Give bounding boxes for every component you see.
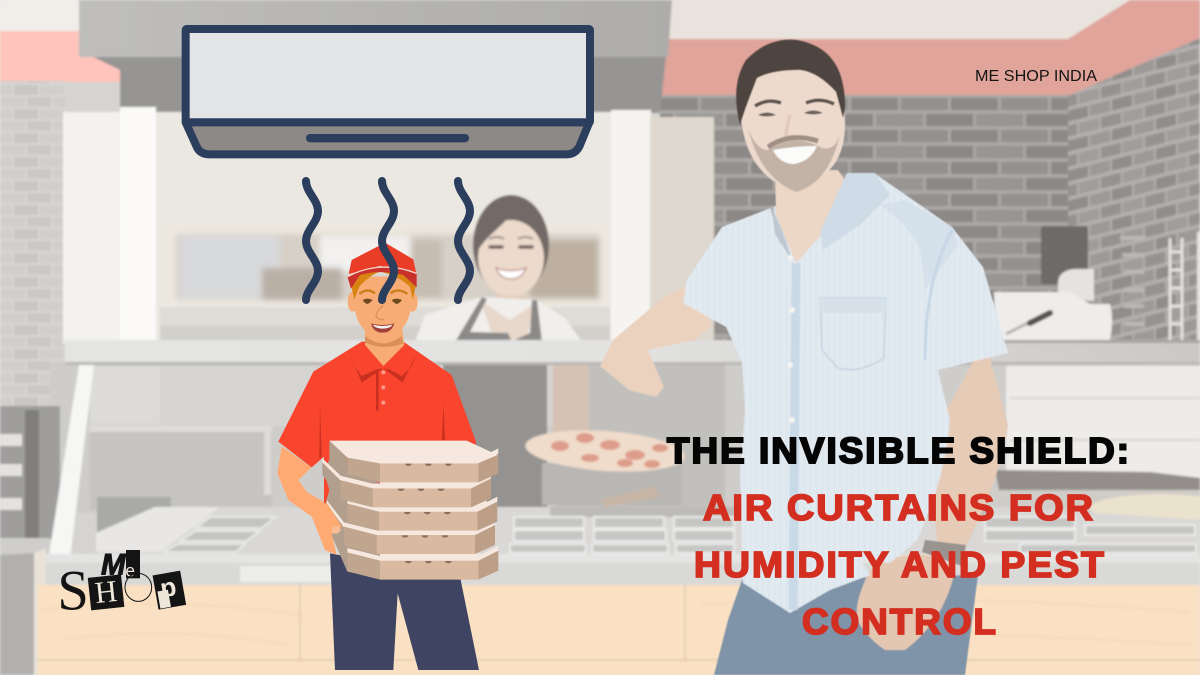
back band right xyxy=(995,470,1200,495)
thumb xyxy=(330,525,342,535)
teeth xyxy=(373,325,393,329)
lower panel left xyxy=(90,428,272,510)
lower panel post xyxy=(264,425,271,495)
stack filler xyxy=(323,460,380,578)
beard xyxy=(748,125,842,192)
box 1 flap xyxy=(329,441,347,474)
window dark right xyxy=(530,240,598,298)
box 3 xyxy=(346,497,497,531)
steam trays centre and right xyxy=(510,517,1196,553)
wood grain xyxy=(40,599,1190,645)
woman neck xyxy=(496,275,526,315)
AC vent slot xyxy=(306,134,469,142)
title line 2: AIR CURTAINS FOR xyxy=(703,487,1095,528)
placket xyxy=(793,263,796,610)
lower right of woman xyxy=(555,365,725,515)
salmon wall band right xyxy=(662,0,1200,96)
stool light slats xyxy=(0,440,22,504)
range hood upper xyxy=(79,0,672,57)
woman hair top xyxy=(478,212,546,250)
logo: Me Shop xyxy=(57,549,186,622)
woman apron lower xyxy=(443,363,547,518)
wall upper left xyxy=(0,0,82,32)
woman chest xyxy=(480,300,537,342)
rail highlights xyxy=(46,554,1200,563)
brick wall centre xyxy=(660,95,1070,345)
neck shadow xyxy=(365,336,403,347)
nose xyxy=(376,305,384,320)
polo shirt xyxy=(278,342,476,507)
woman brows xyxy=(489,237,533,239)
pizza peel handle xyxy=(600,486,660,507)
woman eyes xyxy=(490,245,532,249)
buttons xyxy=(787,255,795,423)
mouth xyxy=(371,323,394,333)
pizza toppings xyxy=(551,433,668,468)
lower panel rail xyxy=(89,425,272,432)
rail light patches xyxy=(240,566,340,582)
AC body xyxy=(186,29,590,122)
steam trays left xyxy=(163,517,275,552)
window mid xyxy=(412,240,442,298)
eyebrows xyxy=(359,290,407,294)
pizza pan xyxy=(542,463,682,505)
sleeve seam xyxy=(925,230,952,360)
delivery man illustration xyxy=(277,243,498,670)
wood front xyxy=(38,585,1200,675)
appliance black box xyxy=(1041,226,1088,284)
logo H tile: H xyxy=(93,574,119,610)
AC lower tray xyxy=(186,122,589,154)
counter lower edge xyxy=(65,362,1200,365)
stack backing xyxy=(380,463,490,563)
moustache xyxy=(768,138,818,147)
smile xyxy=(773,146,817,164)
box 2 xyxy=(340,473,491,507)
hand in pocket xyxy=(857,554,955,650)
collar left facing xyxy=(771,205,793,262)
back arm xyxy=(925,340,1008,560)
eyebrows xyxy=(755,100,834,106)
box 1 lid xyxy=(329,441,498,463)
airflow waves xyxy=(306,181,470,300)
stool leg xyxy=(25,410,39,540)
logo e tile xyxy=(126,550,140,578)
logo P tile: p xyxy=(158,571,179,603)
logo M: M xyxy=(101,549,126,582)
box 5 xyxy=(347,546,498,580)
pocket xyxy=(820,298,886,370)
counter upper right shelf xyxy=(1000,339,1200,343)
rack xyxy=(1170,238,1182,340)
appliance base white xyxy=(994,292,1112,340)
rack bowls xyxy=(1120,238,1146,324)
woman face xyxy=(478,220,544,296)
hair xyxy=(736,40,845,125)
rack post xyxy=(1197,232,1200,340)
oven white column xyxy=(120,107,156,345)
shirt buttons xyxy=(381,370,385,405)
cabinet right xyxy=(1006,366,1200,486)
brick wall left xyxy=(0,81,66,406)
face xyxy=(741,62,845,187)
box 5 flap xyxy=(330,532,347,572)
woman shirt xyxy=(415,297,582,342)
brick wall right xyxy=(1068,38,1200,345)
neck xyxy=(775,170,852,263)
brand label: ME SHOP INDIA xyxy=(975,68,1097,85)
knife handle xyxy=(1030,313,1050,323)
lower centre xyxy=(160,366,560,426)
neck xyxy=(365,325,404,366)
faucet xyxy=(1058,269,1094,301)
hair xyxy=(351,270,416,299)
woman apron strap right xyxy=(510,300,542,342)
collar right xyxy=(820,173,890,250)
wave right xyxy=(458,181,470,300)
lower left light area xyxy=(90,366,160,424)
dough xyxy=(1090,494,1200,522)
pizza boxes stack xyxy=(322,441,498,580)
left block xyxy=(0,553,34,675)
right lower xyxy=(980,490,1200,530)
jeans xyxy=(714,575,978,675)
window dark lower xyxy=(262,268,342,300)
man in denim shirt xyxy=(600,40,1008,675)
lower glass zone xyxy=(50,363,1010,513)
title xyxy=(667,430,1131,642)
cap brim xyxy=(347,267,417,289)
knife xyxy=(1006,322,1030,334)
shirt shoulder tint xyxy=(880,200,958,290)
front rail xyxy=(46,554,1200,585)
air conditioner unit xyxy=(186,29,590,154)
logo S: S xyxy=(57,560,89,622)
wave left xyxy=(306,181,318,300)
salmon wall band left xyxy=(0,31,120,82)
left block edge xyxy=(34,548,46,675)
woman hair xyxy=(473,195,549,295)
pizza xyxy=(524,425,686,477)
tray wall light xyxy=(96,507,220,552)
pizza crust xyxy=(524,425,686,477)
ear right xyxy=(408,292,418,312)
cap crown xyxy=(349,243,417,275)
box 4 xyxy=(344,520,495,554)
wave centre xyxy=(382,181,394,300)
cap stripe xyxy=(348,267,417,277)
logo O xyxy=(125,573,152,601)
logo e: e xyxy=(125,561,135,581)
top counter xyxy=(65,340,1200,364)
woman's arm below counter xyxy=(553,365,589,435)
cabinet line xyxy=(1010,398,1200,440)
collar left xyxy=(770,205,780,245)
collar fold xyxy=(319,353,445,459)
shirt body xyxy=(683,173,1008,613)
oven ledge xyxy=(160,307,610,326)
title line 4: CONTROL xyxy=(802,601,998,642)
wall upper right xyxy=(660,0,1200,40)
oven window frame xyxy=(164,222,608,306)
box 4 flap xyxy=(327,500,344,527)
logo P white panel xyxy=(157,590,171,609)
box 1 xyxy=(347,448,498,482)
tray bay shadow xyxy=(550,507,990,517)
oven right column xyxy=(611,110,651,342)
woman smile xyxy=(496,268,526,279)
pocket flap xyxy=(820,298,886,313)
window glow xyxy=(180,236,280,298)
wood panel lines xyxy=(38,585,1200,660)
window glow centre xyxy=(320,236,410,272)
title line 1: THE INVISIBLE SHIELD: xyxy=(667,430,1131,471)
woman apron strap left xyxy=(455,297,512,342)
title line 3: HUMIDITY AND PEST xyxy=(694,544,1106,585)
glass post xyxy=(47,365,94,567)
tray bay back xyxy=(96,507,1200,556)
box 3 flap xyxy=(329,484,347,517)
ear left xyxy=(348,292,358,312)
lower dark area xyxy=(97,497,171,533)
oven window xyxy=(176,234,600,300)
front arm xyxy=(600,285,712,397)
watch xyxy=(922,540,966,566)
oven steel front xyxy=(155,112,617,342)
eyes xyxy=(363,299,402,304)
stool xyxy=(0,406,60,540)
floor behind xyxy=(0,538,50,558)
box 2 flap xyxy=(322,462,341,498)
area under ledge xyxy=(160,326,610,341)
box 2 lid strip xyxy=(322,458,341,481)
eyes xyxy=(758,110,823,116)
oven right panel xyxy=(650,117,714,343)
oven left column xyxy=(63,112,121,344)
range hood xyxy=(79,0,672,113)
face xyxy=(352,277,413,339)
arm and hand xyxy=(277,447,342,555)
nose shade xyxy=(786,115,800,138)
trousers xyxy=(330,553,479,670)
